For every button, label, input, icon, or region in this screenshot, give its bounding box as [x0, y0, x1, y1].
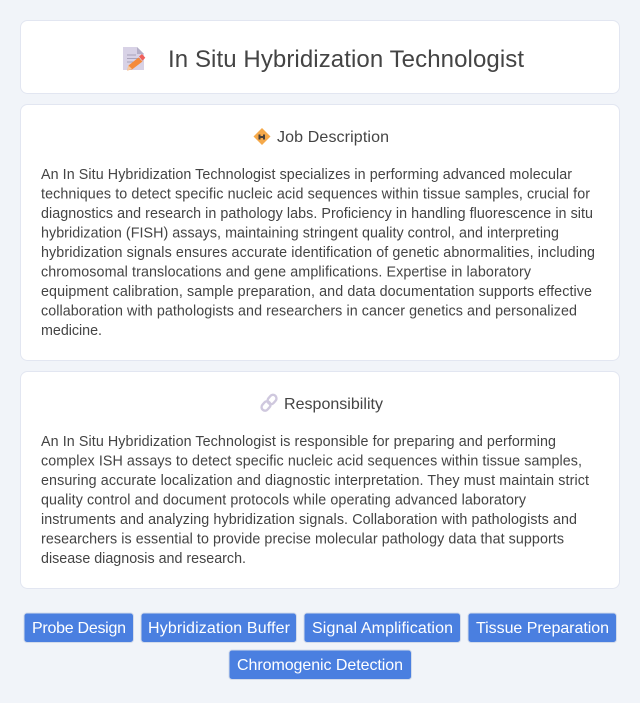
- icon: chain link: [260, 393, 278, 412]
- text block: responsibility: researchers is essential to provide precise molecular pathology data that supports: [41, 532, 564, 548]
- icon: orange diamond: [254, 128, 270, 145]
- text block: job description: [41, 167, 595, 339]
- text block: responsibility: ensuring accurate localization and diagnostic interpretation. They must maintain strict: [41, 473, 589, 489]
- icon: document with pencil: [123, 47, 145, 70]
- tag: signal amplification: [304, 613, 460, 642]
- text block: job description: techniques to detect specific nucleic acid sequences within tissue samples, crucial for: [41, 186, 590, 202]
- text block: job description: hybridization (FISH) assays, maintaining stringent quality control, and interpreting: [41, 226, 559, 242]
- text block: job description: An In Situ Hybridization Technologist specializes in performing advanced molecular: [41, 167, 572, 183]
- tag: tissue preparation: Tissue Preparation: [476, 620, 609, 637]
- text block: responsibility: [41, 434, 589, 567]
- text block: responsibility: quality control and document protocols while operating advanced laboratory: [41, 492, 527, 508]
- text block: responsibility: disease diagnosis and research.: [41, 551, 246, 567]
- text block: job description: medicine.: [41, 323, 102, 339]
- text block: job description: equipment calibration, sample preparation, and data documentation supports effective: [41, 284, 592, 300]
- tag: chromogenic detection: [229, 650, 412, 680]
- panel: responsibility: [20, 372, 620, 588]
- heading: job description: Job Description: [277, 129, 389, 146]
- text block: responsibility: complex ISH assays to detect specific nucleic acid sequences within tissue samples,: [41, 454, 582, 470]
- panel: job description: [20, 104, 620, 360]
- tag: hybridization buffer: Hybridization Buffer: [148, 620, 291, 637]
- tag: probe design: [24, 613, 134, 642]
- text block: job description: collaboration with pathologists and researchers in cancer genetics and personalized: [41, 304, 577, 320]
- title: In Situ Hybridization Technologist: [168, 46, 524, 73]
- text block: responsibility: instruments and analyzing hybridization signals. Collaboration with pathologists and: [41, 512, 577, 528]
- tag: hybridization buffer: [141, 613, 296, 642]
- tag: probe design: Probe Design: [32, 620, 126, 637]
- tag: chromogenic detection: Chromogenic Detection: [237, 657, 403, 674]
- heading: responsibility: Responsibility: [284, 396, 383, 413]
- panel: title header: [20, 20, 620, 94]
- text block: responsibility: An In Situ Hybridization Technologist is responsible for preparing and performing: [41, 434, 556, 450]
- text block: job description: hybridization signals ensures accurate identification of genetic abnormalities, including: [41, 245, 595, 261]
- text block: job description: chromosomal translocations and gene amplifications. Expertise in laboratory: [41, 264, 532, 280]
- tag: tissue preparation: [468, 613, 616, 642]
- tag: signal amplification: Signal Amplification: [312, 620, 453, 637]
- text block: job description: diagnostics and research in pathology labs. Proficiency in handling fluorescence in situ: [41, 206, 593, 222]
